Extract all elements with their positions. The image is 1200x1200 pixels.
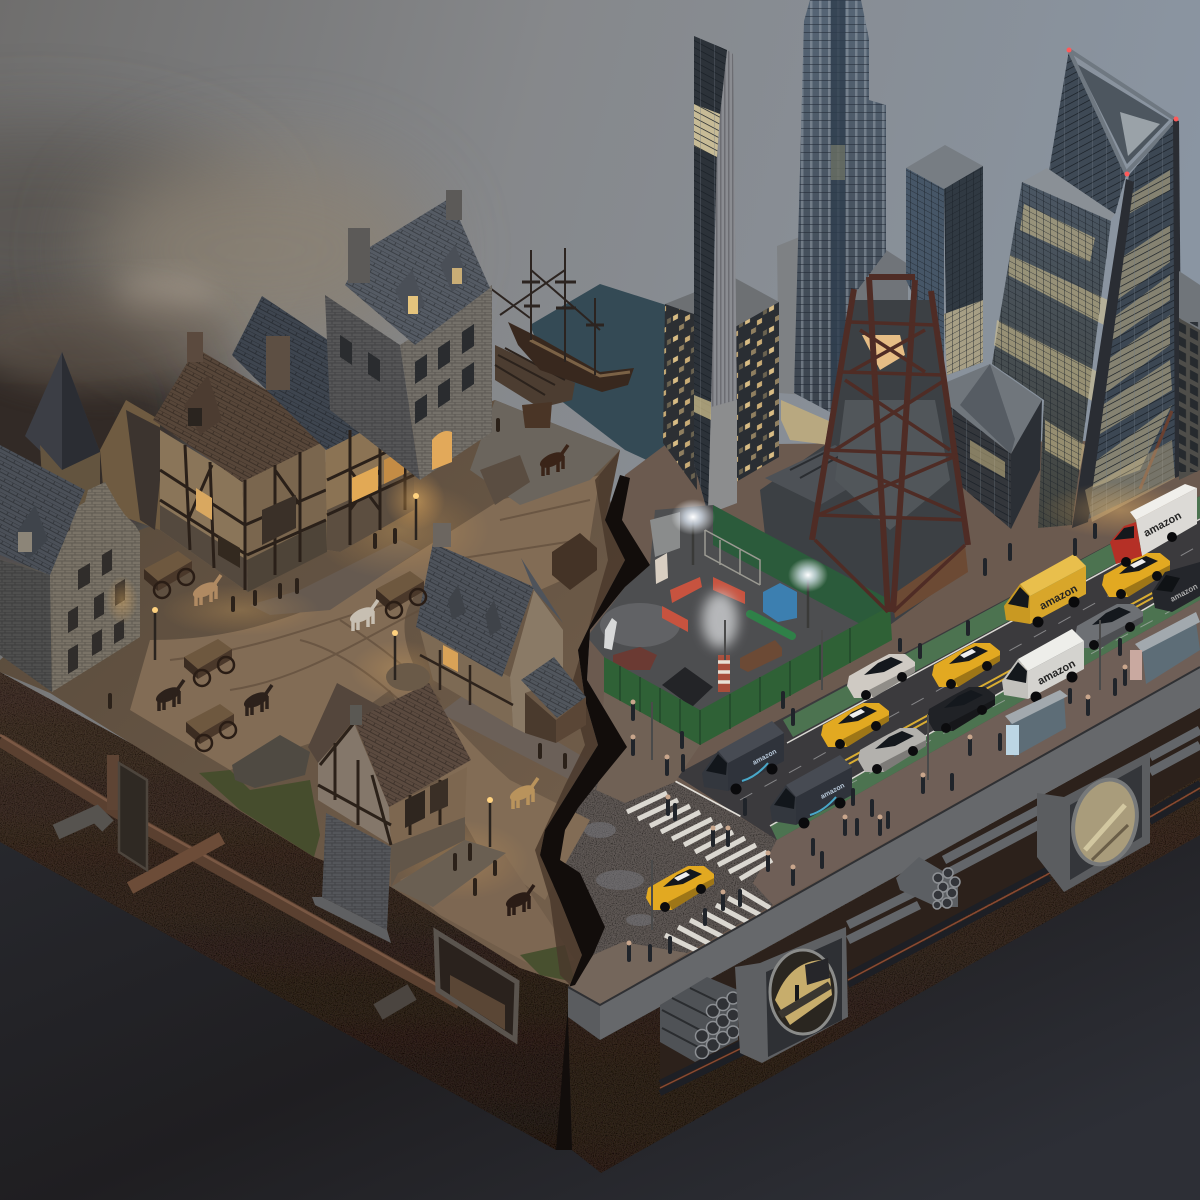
lantern lights — [152, 493, 493, 803]
slender spire tower — [694, 36, 737, 514]
floodlights — [671, 499, 828, 628]
old town carts, horses and lanterns — [110, 402, 568, 916]
dirt roads and lit dust — [130, 400, 620, 982]
cobbled plaza at front house — [391, 840, 506, 907]
half-timbered slate-roof house — [232, 296, 445, 552]
storage boxes — [650, 512, 680, 557]
dark delivery van — [770, 755, 852, 828]
front half-timbered house on stone tower — [308, 683, 471, 943]
subway tunnel box front — [735, 927, 848, 1063]
red cab amazon truck: amazon — [1142, 510, 1184, 540]
smoke clouds — [0, 130, 430, 570]
small gabled brown house — [100, 400, 165, 530]
green pipe — [750, 614, 792, 636]
blue generator — [763, 583, 797, 622]
low pale block behind tall tower — [777, 236, 806, 395]
slab top lip — [568, 667, 1200, 1005]
black car — [927, 687, 995, 733]
pale horse — [508, 778, 538, 809]
modern skyline — [663, 0, 1200, 538]
back hoarding — [713, 505, 890, 640]
corner sidewalk south — [568, 942, 687, 1005]
road surface — [675, 496, 1200, 840]
big angular glass skyscraper — [992, 48, 1182, 528]
corner sidewalk north — [596, 692, 700, 803]
steam — [702, 592, 738, 648]
warm tower plaza glow — [1040, 482, 1200, 538]
bus shelter near — [1005, 690, 1068, 757]
central slate-roof cottage — [416, 523, 586, 743]
dark office block — [663, 277, 779, 490]
conduit bundle front — [660, 977, 739, 1062]
yellow amazon van: amazon — [1038, 583, 1080, 613]
pale block behind derrick — [847, 250, 908, 400]
timber crate — [740, 640, 782, 672]
horse with rider — [504, 885, 534, 916]
subway tunnel box rear — [1037, 752, 1150, 892]
silver car — [858, 728, 926, 774]
right soil cross-section — [568, 708, 1200, 1173]
shop front at tower base — [781, 400, 829, 445]
red-white barriers — [655, 553, 745, 632]
wooden pier — [495, 345, 575, 408]
oil derrick — [812, 277, 968, 612]
bus shelters — [1005, 612, 1200, 757]
dark delivery van: amazon — [820, 782, 846, 801]
pedestrians and cyclists — [626, 525, 1128, 960]
cycle lane lower — [770, 578, 1200, 840]
old town ground — [0, 400, 625, 985]
covered wagon on plaza — [480, 445, 568, 505]
utility pipes and cables — [660, 730, 1200, 1093]
harbour water — [530, 284, 668, 470]
black van — [1152, 562, 1200, 612]
stepped-gable stone house, far left — [0, 445, 140, 692]
traffic — [646, 484, 1200, 912]
intersection asphalt — [560, 780, 777, 955]
trench recess — [660, 708, 1200, 1097]
small glass tower — [906, 145, 983, 375]
wrecked cart — [232, 735, 310, 788]
taxi — [821, 703, 889, 749]
construction site — [587, 499, 892, 745]
taxi — [932, 643, 1000, 689]
half-timbered left house — [153, 332, 327, 592]
dark delivery van: amazon — [752, 748, 778, 767]
road markings — [675, 519, 1200, 826]
cart by cottage — [348, 571, 426, 631]
white car — [847, 654, 915, 700]
crack between eras — [540, 475, 650, 1150]
front green hoarding — [604, 606, 892, 745]
tall stone townhouse — [325, 190, 492, 480]
pipe bundle middle — [896, 857, 960, 909]
small white van — [604, 618, 617, 650]
angular low building — [947, 364, 1042, 529]
street lanterns — [155, 498, 490, 847]
dark studio floor — [0, 830, 1200, 1200]
dark delivery van — [702, 721, 784, 794]
slab corner — [568, 987, 600, 1040]
taxi — [646, 866, 714, 912]
concrete slab edge — [600, 667, 1200, 1040]
corner sidewalk east — [753, 600, 1200, 905]
tall glass tower — [794, 0, 886, 420]
crosswalks — [627, 793, 772, 952]
cart on road — [154, 639, 234, 711]
sailing ship — [490, 248, 634, 392]
sky backdrop — [0, 0, 1200, 900]
concrete building under derrick — [760, 300, 968, 625]
pipe elbow outlet — [56, 814, 108, 832]
dark pit — [662, 667, 713, 707]
medieval spire — [25, 352, 100, 520]
log patch — [386, 663, 430, 691]
cart lower — [186, 685, 272, 751]
cycle lane upper — [783, 496, 1200, 737]
broken outlet — [378, 992, 412, 1012]
black van: amazon — [1169, 582, 1199, 604]
steaming chimney — [718, 655, 730, 692]
plaza crates — [522, 402, 552, 428]
crack rock face — [535, 450, 625, 985]
taxi — [1102, 553, 1170, 599]
yellow amazon van — [1004, 554, 1086, 628]
scaffold — [705, 530, 760, 585]
right edge office — [1179, 271, 1200, 480]
old cellar frame — [436, 932, 517, 1040]
bus shelter far — [1130, 612, 1200, 684]
red cab amazon truck — [1110, 484, 1197, 567]
left soil cross-section — [0, 672, 575, 1150]
wet patches — [584, 822, 654, 926]
sidewalk crates beside cottage — [552, 533, 597, 590]
modern ground base — [560, 440, 1200, 1005]
red machine — [613, 647, 657, 670]
left junction box — [119, 763, 147, 870]
white amazon van — [1002, 629, 1084, 702]
townsfolk — [110, 420, 565, 894]
white amazon van: amazon — [1036, 658, 1078, 688]
grey car — [1075, 604, 1143, 650]
cart at left house — [144, 551, 221, 606]
rusty water main on left face — [0, 735, 460, 1003]
